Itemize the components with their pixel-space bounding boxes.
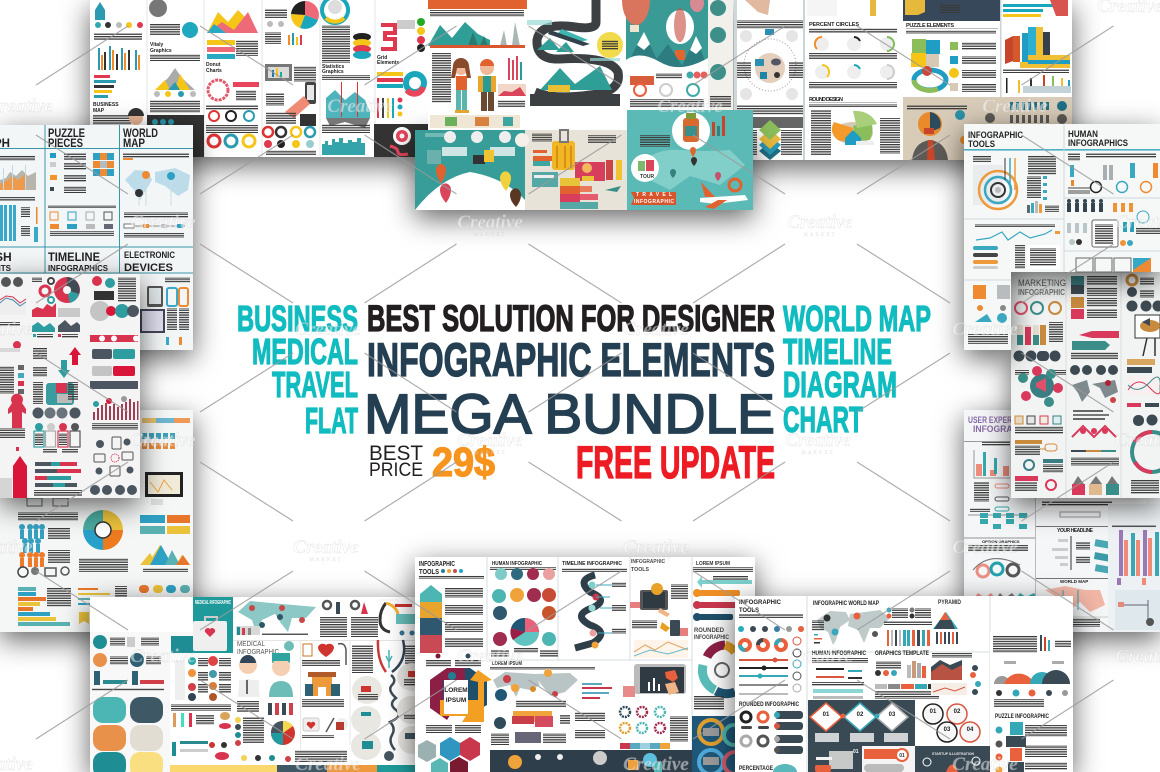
banner: travel infographic: TRAVEL [636, 192, 672, 198]
heading: medical infographic: MEDICAL [237, 641, 265, 648]
heading: human infographics [1068, 129, 1128, 148]
panel: top right flat infographics: PERCENT CIRCLES [809, 22, 859, 28]
heading: infographic tools [968, 130, 1023, 149]
diagram: timeline snake [575, 575, 601, 648]
panel: infographic world map, pyramid, graphics template [735, 596, 1073, 772]
best price label: BEST [369, 442, 423, 465]
watermark: creative market logos: Creative [785, 430, 851, 451]
heading: tools and rounded [739, 599, 781, 614]
heading: timeline infographics [48, 250, 108, 273]
panel: right lower user experience infographic: YOUR HEADLINE [1057, 528, 1094, 534]
panel: right lower left infographics [0, 410, 193, 632]
panel: infographic world map, pyramid, graphics template: ROUNDED INFOGRAPHIC [739, 702, 800, 708]
watermark: creative market logos: Creative [130, 430, 196, 451]
heading: infographic tools: INFOGRAPHIC [968, 130, 1023, 140]
panel: top business infographics strip: MAP [93, 108, 105, 114]
watermark: creative market logos: Creative [457, 212, 523, 233]
watermark: creative market logos: Creative [130, 646, 196, 667]
watermark: creative market logos: Creative [457, 430, 523, 451]
heading: marketing infographic: MARKETING [1018, 278, 1066, 289]
best price label [369, 442, 423, 481]
side list: left categories: MEDICAL [252, 331, 358, 372]
side list: left categories: FLAT [305, 400, 358, 441]
panel: infographic world map, pyramid, graphics template: PERCENTAGE [739, 766, 773, 772]
heading: mega bundle: MEGA BUNDLE [364, 382, 775, 445]
side list: left categories: BUSINESS [237, 298, 358, 339]
diagram: numbered circles: 04 [967, 727, 974, 733]
panel: infographic tools, human and timeline infographics: HUMAN INFOGRAPHIC [492, 561, 542, 567]
panel: travel flat infographics: TOUR [640, 174, 654, 180]
heading: infographic tools: TOOLS [419, 567, 439, 576]
side list: right categories [783, 298, 931, 440]
panel: right lower user experience infographic: OPTION GRAPHICS [982, 539, 1020, 544]
panel: top business infographics strip: BUSINESS [93, 102, 119, 108]
watermark: creative market logos: Creative [982, 96, 1048, 117]
heading: electronic devices: ELECTRONIC [124, 250, 175, 260]
best price label: PRICE [369, 460, 423, 481]
banner: travel infographic [631, 192, 676, 205]
heading: world map: MAP [123, 138, 145, 150]
watermark: creative market logos: MARKET [803, 233, 837, 238]
watermark: creative market logos: Creative [952, 537, 1018, 558]
watermark: creative market logos: MARKET [473, 451, 507, 456]
watermark: creative market logos: Creative [295, 319, 361, 340]
panel: top business infographics strip: Elements [377, 60, 399, 66]
panel: dark process diamonds: 02 [857, 712, 864, 718]
panel: infographic world map, pyramid, graphics template: STARTUP ILLUSTRATION [932, 751, 974, 756]
chart: circular process wheel [83, 510, 123, 550]
diagram: numbered circles: 02 [954, 709, 961, 715]
heading: infographic tools [419, 559, 455, 576]
panel: infographic tools, human and timeline infographics: INFOGRAPHIC [694, 635, 730, 641]
heading: world map [123, 128, 158, 150]
heading: infographic elements: INFOGRAPHIC ELEMENTS [367, 333, 775, 386]
panel: infographic tools, human and timeline infographics: LOREM IPSUM [492, 661, 522, 667]
panel: top business infographics strip: Graphics [150, 48, 172, 54]
watermark: creative market logos: Creative [130, 212, 196, 233]
heading: human infographics: HUMAN [1068, 129, 1098, 139]
panel: top business infographics strip: Statistics [322, 64, 344, 70]
side list: left categories: TRAVEL [272, 364, 358, 405]
heading: world map: WORLD [123, 128, 158, 140]
side list: right categories: TIMELINE [783, 331, 892, 372]
panel: marketing infographic [1011, 272, 1160, 498]
icon: hospital building [305, 672, 340, 696]
diagram: lorem ipsum octagon: IPSUM [446, 697, 466, 704]
watermark: creative market logos: MARKET [309, 558, 343, 563]
chart: vertical bars [93, 399, 138, 420]
heading: tools and rounded: INFOGRAPHIC [739, 599, 781, 606]
panel: medical infographic: MEDICAL INFOGRAPHIC [195, 600, 231, 606]
heading: electronic devices [124, 250, 175, 274]
heading: marketing infographic: INFOGRAPHIC [1018, 288, 1065, 297]
watermark: creative market logos: Creative [787, 212, 853, 233]
panel: medical infographic [90, 597, 430, 772]
watermark: creative market logos: Creative [623, 319, 689, 340]
heading: timeline infographics: TIMELINE [48, 250, 100, 264]
heading: human infographics: INFOGRAPHICS [1068, 138, 1128, 148]
heading: infographic tools: INFOGRAPHIC [419, 559, 455, 568]
center title block [237, 298, 931, 488]
banner: travel infographic: INFOGRAPHIC [634, 199, 674, 205]
panel: top business infographics strip [90, 0, 428, 157]
panel: infographic world map, pyramid, graphics template: 01 [853, 749, 859, 755]
price: 29 dollars: 29$ [432, 439, 495, 485]
watermark: creative market logos: Creative [787, 646, 853, 667]
panel: dark process diamonds [808, 700, 915, 746]
panel: travel flat infographics [415, 0, 753, 210]
chart: red donut with gears [40, 277, 80, 303]
panel: timeline infographics [0, 274, 140, 498]
panel: infographic tools, human and timeline infographics: LOREM IPSUM [696, 561, 730, 567]
panel: right lower user experience infographic: USER EXPERIENCE [968, 415, 1033, 425]
chart: human pie [510, 618, 539, 646]
panel: infographic tools, human and timeline infographics: INFOGRAPHIC [631, 559, 665, 565]
watermark: creative market logos: MARKET [801, 451, 835, 456]
side list: right categories: DIAGRAM [783, 364, 897, 405]
panel: top business infographics strip: Graphics [322, 69, 344, 75]
watermark: creative market logos: Creative [657, 96, 723, 117]
chart: pyramid [933, 612, 958, 629]
diagram: lorem ipsum octagon [430, 668, 492, 722]
watermark: creative market logos: Creative [457, 646, 523, 667]
heading: puzzle pieces [48, 128, 85, 150]
panel: infographic world map, pyramid, graphics template: PYRAMID [938, 600, 962, 606]
watermark: creative market logos: Creative [327, 96, 393, 117]
side list: right categories: CHART [783, 399, 863, 440]
panel: right lower user experience infographic: WORLD MAP [1060, 579, 1088, 584]
panel: right lower user experience infographic [964, 410, 1160, 632]
icon: megaphone wheel [1018, 366, 1063, 407]
panel: infographic world map, pyramid, graphics template: 01 [899, 753, 905, 759]
diagram: lorem ipsum octagon: LOREM [444, 687, 468, 694]
diagram: numbered circles: 01 [930, 709, 937, 715]
panel: top business infographics strip: Donut [206, 62, 221, 68]
panel: puzzle pieces, world map, electronic devices [0, 125, 193, 350]
heading: best solution for designer: BEST SOLUTION FOR DESIGNER [367, 298, 775, 339]
heading: tools and rounded: TOOLS [739, 607, 760, 614]
free update label: FREE UPDATE [576, 437, 775, 488]
panel: infographic tools, human and timeline infographics: TOOLS [631, 567, 649, 573]
icon: puzzle tower [996, 722, 1026, 772]
panel: infographic tools and human infographics [964, 124, 1160, 350]
heading: puzzle infographic: PUZZLE INFOGRAPHIC [995, 714, 1050, 720]
heading: medical infographic: INFOGRAPHIC [237, 649, 279, 656]
panel: top right flat infographics: ROUND DESIGN [809, 97, 843, 103]
heading: human infographic: HUMAN INFOGRAPHIC [812, 651, 867, 657]
panel: dark process diamonds: 03 [889, 712, 896, 718]
illustration: doctors [238, 653, 293, 697]
chart: overlapping semicircles [994, 670, 1070, 684]
watermark: creative market logos: Creative [952, 319, 1018, 340]
heading: puzzle pieces: PIECES [48, 138, 83, 150]
panel: top business infographics strip: Grid [377, 55, 387, 61]
panel: infographic tools, human and timeline infographics [415, 557, 755, 772]
panel: top business infographics strip: Charts [206, 68, 222, 74]
heading: infographic world map: INFOGRAPHIC WORLD MAP [813, 601, 879, 607]
watermark: creative market logos: MARKET [639, 558, 673, 563]
watermark: creative market logos: Creative [293, 537, 359, 558]
side list: right categories: WORLD MAP [783, 298, 931, 339]
heading: marketing infographic [1018, 278, 1066, 297]
panel: infographic tools, human and timeline infographics: ROUNDED [694, 628, 725, 634]
heading: infographic tools: TOOLS [968, 139, 995, 149]
chart: medical pie [271, 721, 295, 745]
heading: puzzle pieces: PUZZLE [48, 128, 85, 140]
diagram: rounded arrows [702, 645, 735, 694]
heading: electronic devices: DEVICES [124, 262, 173, 274]
heading: graphics template: GRAPHICS TEMPLATE [875, 651, 929, 657]
panel: infographic tools, human and timeline infographics: TIMELINE INFOGRAPHIC [562, 561, 622, 567]
watermark: creative market logos: Creative [623, 537, 689, 558]
diagram: numbered circles: 03 [944, 727, 951, 733]
panel: top right flat infographics [734, 0, 1072, 160]
panel: top business infographics strip: Vitaly [150, 42, 163, 48]
heading: timeline infographics: INFOGRAPHICS [48, 263, 108, 273]
panel: dark process diamonds: 01 [823, 712, 830, 718]
watermark: creative market logos: MARKET [473, 233, 507, 238]
panel: top right flat infographics: PUZZLE ELEMENTS [906, 23, 954, 29]
chart: stacked horizontal bars [35, 462, 81, 487]
side list: left categories [237, 298, 358, 441]
panel: right lower user experience infographic: INFOGRAPHIC [973, 424, 1033, 434]
heading: medical infographic [237, 641, 279, 656]
diagram: numbered circles [923, 704, 980, 742]
